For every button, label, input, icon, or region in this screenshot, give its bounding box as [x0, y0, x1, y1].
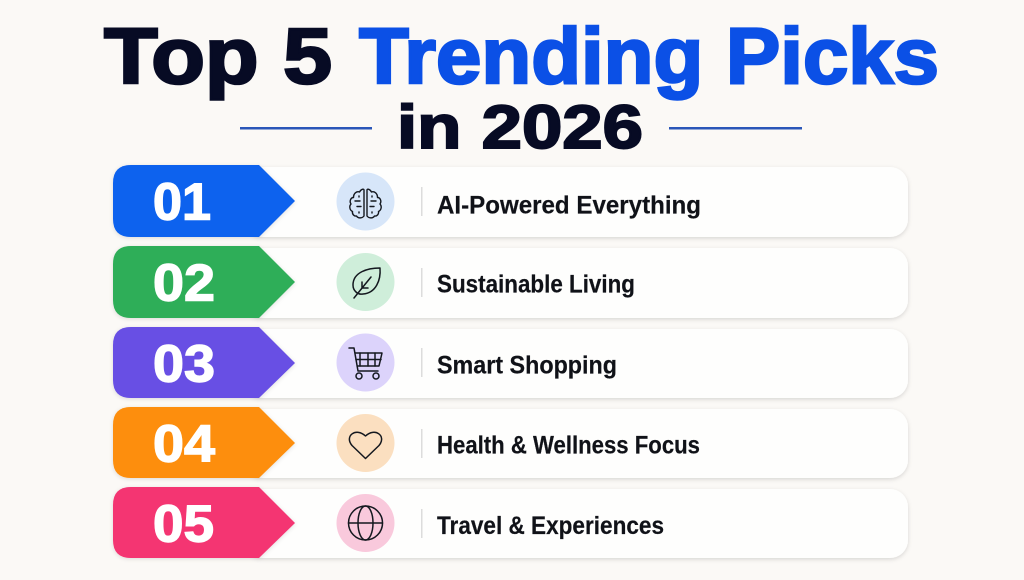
- title line 1: Trending Picks: Trending Picks: [359, 11, 939, 100]
- card: [245, 167, 908, 237]
- label: Travel & Experiences: [437, 512, 664, 540]
- label: AI-Powered Everything: [437, 192, 701, 220]
- icon: shopping cart: [336, 334, 394, 392]
- number tag 01: 01: [153, 174, 211, 232]
- icon: globe: [336, 494, 394, 552]
- separator: [421, 429, 422, 458]
- row 2: Sustainable Living: [113, 246, 908, 318]
- row 3: Smart Shopping: [113, 327, 908, 398]
- title line 2: in 2026: in 2026: [397, 93, 643, 161]
- label: Sustainable Living: [437, 270, 635, 298]
- number tag 05: [113, 487, 295, 558]
- title rule left: [240, 127, 372, 130]
- number tag 04: [113, 407, 295, 478]
- icon: heart: [336, 414, 394, 472]
- icon: brain: [336, 172, 394, 230]
- label: Smart Shopping: [437, 352, 617, 380]
- number tag 02: 02: [153, 254, 215, 312]
- separator: [421, 187, 422, 216]
- separator: [421, 268, 422, 297]
- row 4: Health & Wellness Focus: [113, 407, 908, 478]
- card: [245, 409, 908, 478]
- card: [245, 489, 908, 558]
- number tag 05: 05: [153, 496, 214, 554]
- card: [245, 329, 908, 398]
- separator: [421, 348, 422, 377]
- icon: leaf: [336, 253, 394, 311]
- label: Health & Wellness Focus: [437, 432, 700, 460]
- title line 1: Top 5: Top 5: [104, 11, 332, 100]
- number tag 01: [113, 165, 295, 237]
- card: [245, 248, 908, 318]
- number tag 02: [113, 246, 295, 318]
- row 1: AI-Powered Everything: [113, 165, 908, 237]
- title rule right: [669, 127, 802, 130]
- number tag 04: 04: [153, 416, 215, 474]
- separator: [421, 509, 422, 538]
- number tag 03: [113, 327, 295, 398]
- title: [104, 11, 939, 161]
- row 5: Travel & Experiences: [113, 487, 908, 558]
- number tag 03: 03: [153, 336, 215, 394]
